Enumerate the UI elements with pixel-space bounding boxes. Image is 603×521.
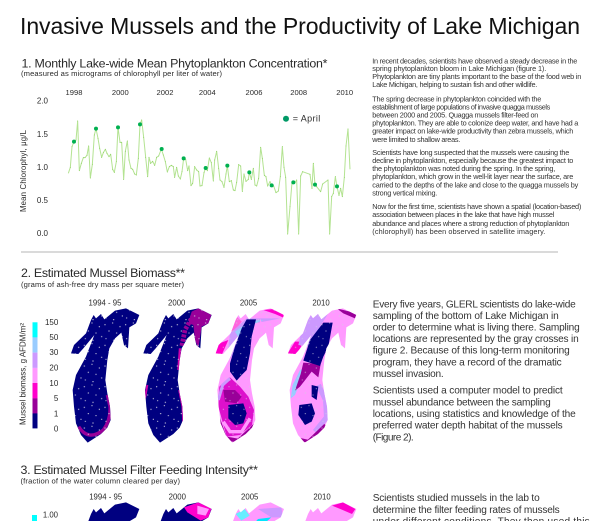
text block: sampling: mussel abundance between the sampling xyxy=(373,397,551,408)
text block: intro: association between places in the lake that have high mussel xyxy=(372,210,555,219)
color scale tick labels: 1 xyxy=(54,409,59,418)
panel: section 2 mussel biomass xyxy=(18,266,357,443)
map: 2000 filter feeding xyxy=(160,502,212,521)
year axis labels: 2006 xyxy=(246,88,262,97)
map: 2000 biomass xyxy=(143,308,212,443)
color scale tick labels: 5 xyxy=(54,394,59,403)
text block: sampling: mussel invasion. xyxy=(373,369,444,380)
text block: intro: greater impact on lake-wide productivity than zebra mussels, which xyxy=(372,126,573,136)
title: Invasive Mussels and the Productivity of Lake Michigan xyxy=(20,13,580,39)
text block: intro: phytoplankton. They are able to colonize deep water, and have had a xyxy=(372,118,579,128)
map year labels: 2000 xyxy=(168,299,186,308)
text block: intro: Phytoplankton are tiny plants important to the base of the food web in xyxy=(372,72,581,81)
map year labels: 2010 xyxy=(313,493,331,502)
year axis labels: 2002 xyxy=(157,88,173,97)
text block: intro: decline in phytoplankton, especially because the greatest impact to xyxy=(372,156,573,165)
year axis labels: 1998 xyxy=(66,88,82,97)
text block: sampling: locations, using statistics and knowledge of the xyxy=(373,409,576,420)
text block: sampling: figure 2. Because of this long-term monitoring xyxy=(373,346,570,357)
text block: sampling: preferred water depth habitat of the mussels xyxy=(373,421,563,432)
text block: intro: phytoplankton, which grow in the well-lit layer near the surface, are xyxy=(372,172,573,181)
year axis labels: 2008 xyxy=(290,88,307,97)
subheading: section 3: (fraction of the water column cleared per day) xyxy=(20,477,180,486)
map year labels xyxy=(89,493,331,502)
text block: intro: strong vertical mixing. xyxy=(372,188,437,198)
color scale tick labels: 10 xyxy=(49,379,59,388)
map year labels: 1994 - 95 xyxy=(89,299,122,308)
text block: sampling xyxy=(373,300,580,443)
year axis labels: 2010 xyxy=(336,88,353,97)
year axis labels: 2004 xyxy=(199,88,216,97)
text block: intro: were limited to shallow areas. xyxy=(371,135,460,144)
color scale tick labels: 0 xyxy=(54,425,59,434)
map: 2005 filter feeding xyxy=(233,502,284,521)
map: 2005 biomass xyxy=(212,308,285,443)
text block: intro: between 2000 and 2005. Quagga mussels filter-feed on xyxy=(372,110,538,120)
text block: filter feeding xyxy=(373,493,590,521)
color scale tick labels: 30 xyxy=(49,348,59,357)
map year labels xyxy=(89,299,330,308)
text block: intro: Scientists have long suspected that the mussels were causing the xyxy=(372,148,569,157)
text block: intro: establishment of large populations of invasive quagga mussels xyxy=(372,102,551,112)
text block: intro xyxy=(371,56,581,236)
color scale tick labels: 20 xyxy=(49,363,59,372)
color scale title: Mussel biomass, g AFDM/m² xyxy=(18,323,28,425)
text block: sampling: Scientists used a computer model to predict xyxy=(373,386,563,397)
color scale top label: 1.00 xyxy=(43,510,59,520)
text block: intro: In recent decades, scientists have observed a steady decrease in the xyxy=(372,56,577,66)
panel: section 3 filter feeding xyxy=(20,463,356,521)
text block: sampling: locations are represented by the gray crosses in xyxy=(373,334,579,345)
map year labels: 2010 xyxy=(312,299,330,308)
map: 1994-95 biomass xyxy=(71,308,139,443)
map year labels: 2005 xyxy=(240,299,258,308)
y axis title: Mean Chlorophyl, μg/L xyxy=(19,129,28,212)
color scale: biomass xyxy=(32,322,38,428)
color scale tick labels: 50 xyxy=(49,333,59,342)
y axis tick labels: 1.5 xyxy=(37,130,49,139)
panel: section 1 chlorophyll chart xyxy=(19,56,353,238)
legend: April: = April xyxy=(293,113,320,123)
text block: intro: carried to the depths of the lake and close to the quagga mussels by xyxy=(372,180,579,190)
text block: intro: (chlorophyll) has been observed in satellite imagery. xyxy=(372,227,545,236)
color scale tick labels: 150 xyxy=(45,318,59,327)
y axis tick labels: 2.0 xyxy=(37,97,49,106)
text block: intro: spring phytoplankton bloom in Lake Michigan (figure 1). xyxy=(372,64,546,73)
text block: intro: Lake Michigan, helping to sustain fish and other wildlife. xyxy=(372,80,537,89)
map year labels: 1994 - 95 xyxy=(89,493,123,502)
color scale tick labels xyxy=(45,318,59,434)
map year labels: 2005 xyxy=(241,493,259,502)
text block: sampling: (Figure 2). xyxy=(373,432,414,443)
map: 2010 filter feeding xyxy=(305,502,356,521)
line chart: monthly chlorophyll xyxy=(68,120,350,234)
text block: sampling: program, they have a record of the dramatic xyxy=(373,357,562,368)
text block: sampling: Every five years, GLERL scientists do lake-wide xyxy=(373,300,576,311)
heading: section 1: 1. Monthly Lake-wide Mean Phytoplankton Concentration* xyxy=(22,56,328,70)
color scale: filter feeding xyxy=(32,515,37,521)
April markers xyxy=(72,122,339,188)
text block: intro: abundance and places where a strong reduction of phytoplankton xyxy=(372,219,569,228)
y axis tick labels: 0.5 xyxy=(37,196,49,205)
map: 2010 biomass xyxy=(287,308,357,443)
text block: intro: The spring decrease in phytoplankton coincided with the xyxy=(372,94,541,104)
y axis tick labels: 0.0 xyxy=(37,229,49,238)
map: 1994-95 filter feeding xyxy=(71,502,139,521)
y axis tick labels xyxy=(37,97,49,238)
year axis labels xyxy=(66,88,353,97)
subheading: section 2: (grams of ash-free dry mass per square meter) xyxy=(21,280,184,289)
text block: sampling: order to determine what is living there. Sampling xyxy=(373,322,580,333)
heading: section 3: 3. Estimated Mussel Filter Feeding Intensity** xyxy=(20,463,258,477)
map year labels: 2000 xyxy=(169,493,187,502)
heading: section 2: 2. Estimated Mussel Biomass** xyxy=(21,266,185,280)
text block: intro: Now for the first time, scientists have shown a spatial (location-based) xyxy=(372,202,581,211)
subheading: section 1: (measured as micrograms of chlorophyll per liter of water) xyxy=(21,69,222,78)
text block: filter feeding: Scientists studied mussels in the lab to xyxy=(373,493,540,504)
text block: sampling: sampling of the bottom of Lake Michigan in xyxy=(373,311,559,322)
text block: intro: the phytoplankton was noted during the spring. In the spring, xyxy=(372,164,555,173)
y axis tick labels: 1.0 xyxy=(37,163,49,172)
text block: filter feeding: determine the filter feeding rates of mussels xyxy=(373,505,560,516)
year axis labels: 2000 xyxy=(112,88,129,97)
